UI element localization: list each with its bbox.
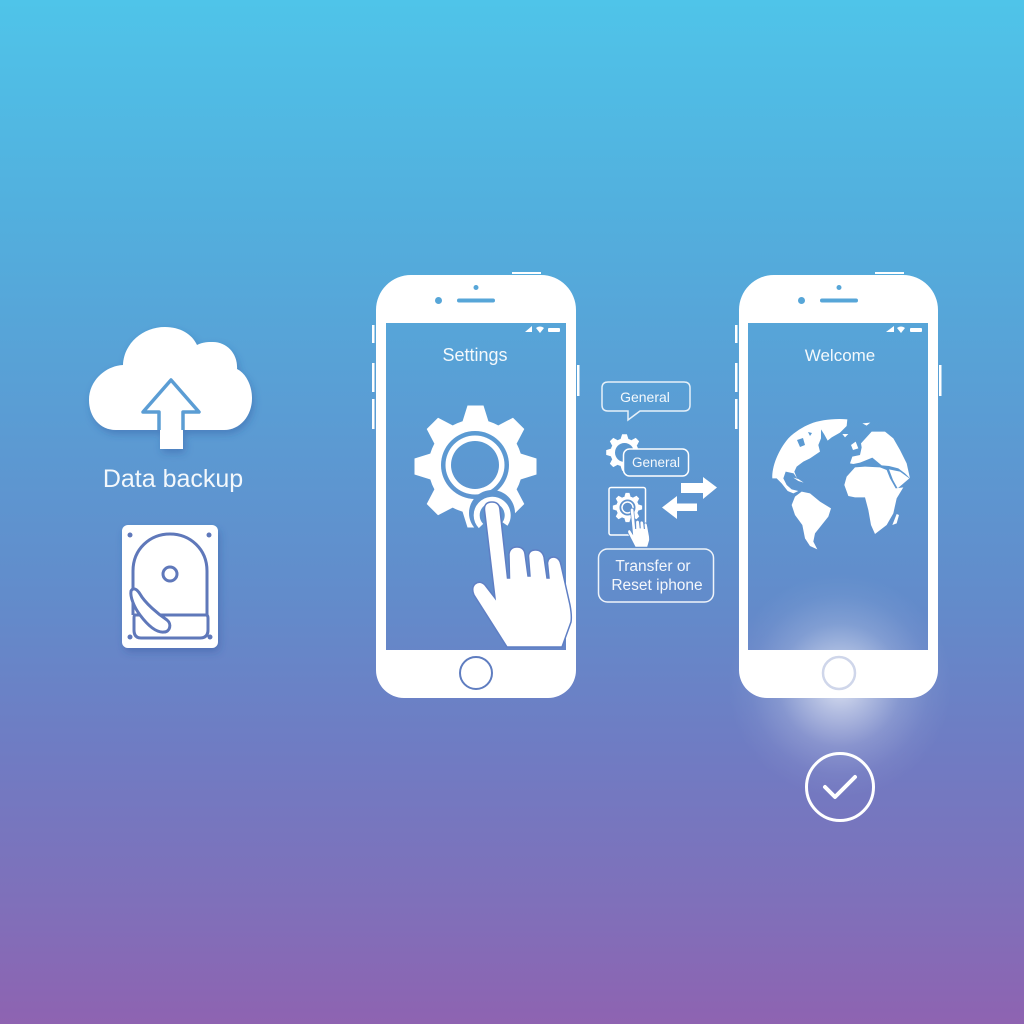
arrow: right: [681, 477, 717, 499]
hudson bay and lakes: [797, 432, 812, 447]
box: transfer or reset: Reset iphone: [611, 577, 703, 594]
icon: success check: [806, 754, 874, 820]
icon: small gear: [606, 434, 643, 471]
madagascar: [892, 514, 899, 525]
icon: settings gear: [414, 406, 536, 528]
button: general: [624, 449, 688, 476]
cuba: [793, 478, 804, 483]
camera and speaker: [435, 285, 495, 304]
label: data backup: Data backup: [103, 465, 243, 493]
icon: cloud upload: [89, 327, 252, 449]
glow under welcome phone: [728, 573, 952, 797]
small islands: [842, 423, 870, 437]
icon: pointing hand: [473, 502, 571, 647]
screen title: Welcome: [805, 346, 875, 365]
africa: [844, 467, 903, 534]
screen title: Settings: [442, 345, 508, 365]
phone: welcome: [735, 272, 942, 698]
icon: tap ring: [477, 500, 508, 526]
panel: steps between phones: [598, 382, 717, 602]
britain: [851, 442, 858, 450]
status icons: [886, 326, 922, 333]
box: transfer or reset: Transfer or: [615, 558, 691, 575]
phone body with screen cut-out: [376, 275, 576, 698]
home button: [460, 657, 492, 689]
camera and speaker: [798, 285, 858, 304]
home button: [823, 657, 855, 689]
eurasia: [850, 432, 910, 478]
icon: hard drive: [122, 525, 218, 648]
box: transfer or reset: [598, 549, 714, 602]
button: general: General: [632, 455, 680, 470]
phone body with screen cut-out: [739, 275, 938, 698]
arabia: [889, 469, 909, 488]
speech bubble: general: [602, 382, 690, 420]
north america and greenland: [772, 419, 847, 493]
south america: [792, 492, 831, 549]
phone: settings: [372, 272, 580, 698]
panel: data backup: [89, 327, 252, 648]
side buttons: [372, 272, 580, 429]
side buttons: [735, 272, 942, 429]
status icons: [525, 326, 560, 333]
speech bubble: general: General: [620, 389, 670, 405]
icon: globe: [772, 419, 910, 549]
arrow: left: [662, 496, 697, 519]
icon: tablet with gear and hand: [609, 488, 649, 547]
